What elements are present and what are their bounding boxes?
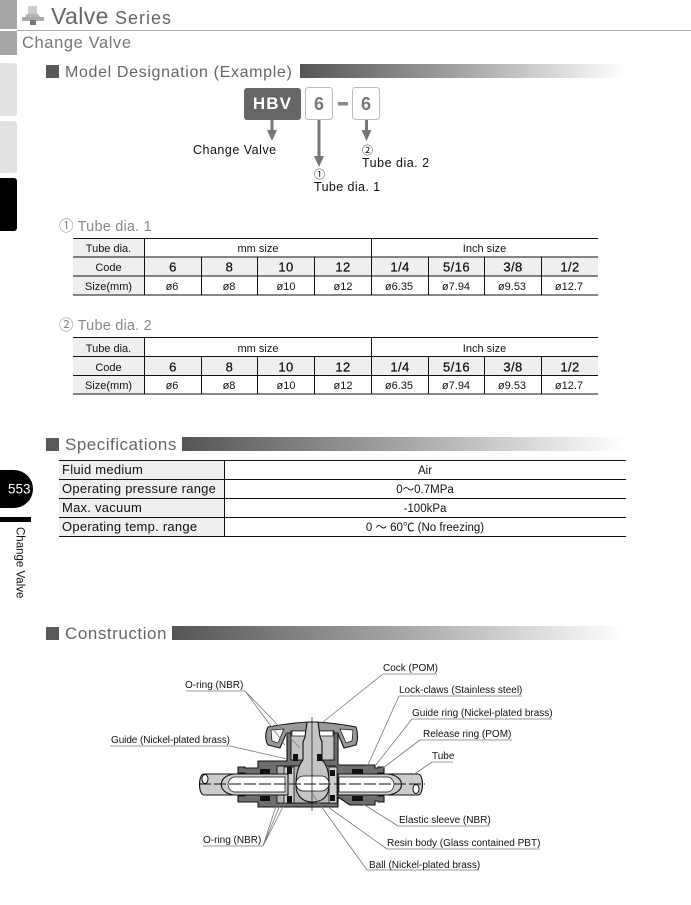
heading: specifications: Specifications xyxy=(65,435,177,454)
sidebar: top grey blocks xyxy=(0,0,17,55)
part labels: Cock (POM) xyxy=(383,663,438,674)
label: change valve: Change Valve xyxy=(193,143,277,157)
model box: code 2 xyxy=(352,88,380,120)
table: tube dia 2: ø7.94 xyxy=(442,380,470,392)
part labels xyxy=(111,663,553,871)
table: tube dia 2: 1/2 xyxy=(560,360,580,374)
icon: valve xyxy=(22,6,44,25)
table: specifications: Max. vacuum xyxy=(62,500,142,515)
table: tube dia 2: 3/8 xyxy=(503,360,523,374)
table: tube dia 1: ø7.94 xyxy=(442,281,470,293)
heading: model designation: Model Designation (Example) xyxy=(65,64,292,81)
table: tube dia 2 xyxy=(73,337,598,394)
table: tube dia 2: mm size xyxy=(238,343,278,355)
table: specifications xyxy=(59,460,626,536)
table: tube dia 2: ø10 xyxy=(277,380,295,392)
table: tube dia 1: 5/16 xyxy=(443,260,470,274)
table: tube dia 2: ø6.35 xyxy=(385,380,413,392)
table: tube dia 2: 8 xyxy=(226,360,233,374)
heading: model designation xyxy=(46,64,625,81)
header rule xyxy=(17,30,691,31)
table: tube dia 1: ø6 xyxy=(166,281,178,293)
sidebar rule xyxy=(0,517,31,522)
part labels: O-ring (NBR) xyxy=(185,680,243,691)
body xyxy=(238,733,384,807)
table: tube dia 2: Size(mm) xyxy=(85,380,132,392)
part labels: Resin body (Glass contained PBT) xyxy=(387,838,540,849)
table: tube dia 2: 12 xyxy=(335,360,351,374)
model box: code 1 xyxy=(306,88,332,120)
vertical label: Change Valve xyxy=(14,527,26,598)
label: tube dia 1: ① xyxy=(314,168,325,181)
table: tube dia 2: Tube dia. xyxy=(86,343,131,355)
table: tube dia 1: mm size xyxy=(238,243,278,255)
title: Series xyxy=(115,8,172,28)
table: tube dia 1: 1/2 xyxy=(560,260,580,274)
heading: tube dia 1: ① Tube dia. 1 xyxy=(59,218,152,235)
table: tube dia 1: 6 xyxy=(169,260,177,274)
model box: code 1: 6 xyxy=(314,94,324,114)
label: tube dia 2: ② xyxy=(362,144,373,157)
table: tube dia 1: ø12 xyxy=(334,281,352,293)
table: tube dia 2: Code xyxy=(95,362,122,374)
part labels: Ball (Nickel-plated brass) xyxy=(369,860,480,871)
valve cross-section xyxy=(199,717,425,811)
model code diagram xyxy=(193,88,430,194)
table: tube dia 2: ø6 xyxy=(166,380,178,392)
title: Valve xyxy=(51,3,109,29)
table: tube dia 2: ø9.53 xyxy=(498,380,526,392)
table: tube dia 2: Inch size xyxy=(463,343,506,355)
heading: construction: Construction xyxy=(65,624,167,643)
leader lines xyxy=(110,674,552,870)
table: specifications: Operating pressure range xyxy=(62,481,216,496)
table: tube dia 1: Code xyxy=(95,262,122,274)
dash xyxy=(338,102,348,106)
part labels: Elastic sleeve (NBR) xyxy=(399,815,491,826)
heading: specifications xyxy=(46,435,625,454)
tube ends inserted xyxy=(221,774,288,795)
part labels: Guide (Nickel-plated brass) xyxy=(111,735,230,746)
table: tube dia 2: ø12 xyxy=(334,380,352,392)
heading: tube dia 2: ② Tube dia. 2 xyxy=(59,317,152,334)
part labels: Guide ring (Nickel-plated brass) xyxy=(412,708,553,719)
table: specifications: Fluid medium xyxy=(62,462,143,477)
table: tube dia 1: Inch size xyxy=(463,243,506,255)
table: tube dia 2: 10 xyxy=(278,360,294,374)
construction diagram xyxy=(110,663,553,871)
table: specifications: 0 ～ 60℃ (No freezing) xyxy=(366,522,484,534)
table: tube dia 1: 8 xyxy=(226,260,233,274)
table: tube dia 1: ø9.53 xyxy=(498,281,526,293)
subtitle: Change Valve xyxy=(22,34,132,52)
tube end circles xyxy=(202,774,208,784)
table: tube dia 1 xyxy=(73,238,598,295)
table: specifications: Operating temp. range xyxy=(62,519,197,534)
part labels: O-ring (NBR) xyxy=(203,835,261,846)
model box: HBV: HBV xyxy=(253,94,292,113)
label: tube dia 2: Tube dia. 2 xyxy=(362,156,430,170)
o-rings xyxy=(260,754,363,803)
table: tube dia 1: 3/8 xyxy=(503,260,523,274)
table: specifications: Air xyxy=(418,465,432,477)
ball and stem xyxy=(296,722,329,802)
table: tube dia 1: ø8 xyxy=(223,281,235,293)
table: tube dia 2: ø8 xyxy=(223,380,235,392)
table: tube dia 1: ø10 xyxy=(277,281,295,293)
arrow: code 1 xyxy=(314,120,324,167)
part labels: Tube xyxy=(432,751,455,762)
heading: construction xyxy=(46,624,625,643)
sidebar: tabs xyxy=(0,63,17,231)
body interior xyxy=(291,731,334,760)
table: tube dia 1: ø12.7 xyxy=(555,281,583,293)
table: tube dia 2: ø12.7 xyxy=(555,380,583,392)
table: tube dia 1: 1/4 xyxy=(390,260,410,274)
model box: HBV xyxy=(244,88,301,120)
arrow: code 2 xyxy=(362,120,372,141)
handle xyxy=(266,722,358,748)
table: tube dia 2: 5/16 xyxy=(443,360,470,374)
table: tube dia 1: ø6.35 xyxy=(385,281,413,293)
table: tube dia 2: 1/4 xyxy=(390,360,410,374)
table: specifications: -100kPa xyxy=(404,503,447,515)
page tab: 553: 553 xyxy=(8,482,31,496)
table: tube dia 1: 12 xyxy=(335,260,351,274)
page tab: 553 xyxy=(0,470,33,508)
table: tube dia 1: Tube dia. xyxy=(86,243,131,255)
centre lines xyxy=(311,717,313,811)
part labels: Release ring (POM) xyxy=(423,729,511,740)
table: tube dia 1: 10 xyxy=(278,260,294,274)
table: specifications: 0～0.7MPa xyxy=(396,484,454,496)
arrow: model xyxy=(267,120,277,141)
model box: code 2: 6 xyxy=(361,94,371,114)
tubes xyxy=(200,774,288,795)
table: tube dia 2: 6 xyxy=(169,360,177,374)
part labels: Lock-claws (Stainless steel) xyxy=(399,685,522,696)
label: tube dia 1: Tube dia. 1 xyxy=(314,180,380,194)
table: tube dia 1: Size(mm) xyxy=(85,281,132,293)
